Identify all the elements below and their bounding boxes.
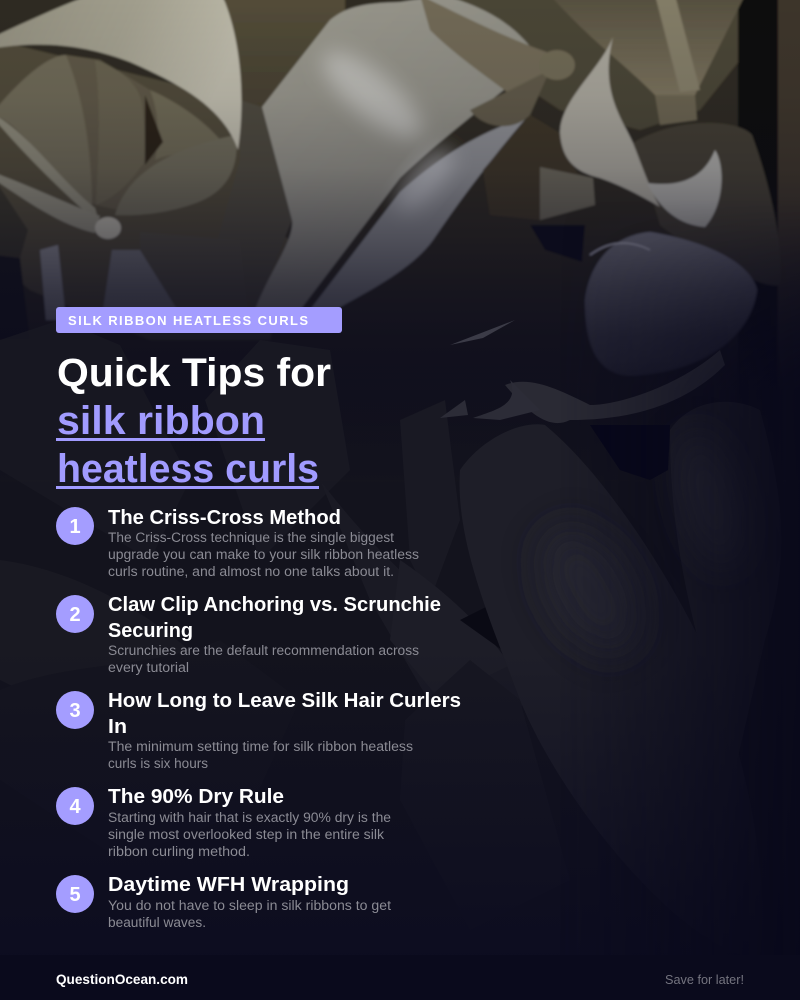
title: silk ribbon: [57, 399, 265, 443]
tip 5: beautiful waves.: [108, 915, 206, 930]
tip 5: [56, 874, 391, 930]
category tag: SILK RIBBON HEATLESS CURLS: [68, 313, 308, 328]
tip 2: every tutorial: [108, 660, 189, 675]
tip 3: 3: [69, 700, 81, 722]
title: [56, 351, 331, 491]
right bow: [550, 0, 745, 95]
tip 3: In: [108, 716, 127, 738]
translucent olive ribbon and small knot: [420, 0, 555, 110]
large satin leaf: [460, 424, 762, 960]
title: Quick Tips for: [57, 351, 331, 395]
tip 4: [56, 786, 391, 859]
tip 1: The Criss-Cross technique is the single biggest: [108, 530, 394, 545]
tip 4: 4: [69, 796, 81, 818]
tip 2: [56, 594, 441, 675]
top left ribbon loop: [0, 0, 241, 150]
tip 1: The Criss-Cross Method: [108, 507, 341, 529]
tip 2: Claw Clip Anchoring vs. Scrunchie: [108, 594, 441, 616]
title: heatless curls: [57, 447, 319, 491]
tip 1: curls routine, and almost no one talks about it.: [108, 564, 394, 579]
tip 4: single most overlooked step in the entire silk: [108, 827, 384, 842]
tip 4: Starting with hair that is exactly 90% dry is the: [108, 810, 391, 825]
tip 4: The 90% Dry Rule: [108, 786, 284, 808]
footer save note: Save for later!: [665, 972, 744, 987]
tip 4: ribbon curling method.: [108, 844, 250, 859]
right satin leaf: [670, 402, 781, 770]
tip 1: [56, 507, 419, 579]
tip 1: 1: [69, 516, 81, 538]
tip 2: Scrunchies are the default recommendation across: [108, 643, 419, 658]
category tag: [56, 307, 342, 333]
dark gap: [590, 425, 670, 480]
knot with strings: [505, 350, 725, 423]
footer bar: [0, 955, 800, 1000]
tip 5: 5: [69, 884, 81, 906]
tip 3: [56, 690, 461, 771]
lower dark ribbons: [0, 320, 800, 980]
tip 3: The minimum setting time for silk ribbon heatless: [108, 739, 413, 754]
tip 3: How Long to Leave Silk Hair Curlers: [108, 690, 461, 712]
dark fade overlay: [0, 0, 800, 480]
upper ribbon bows: [0, 0, 800, 485]
footer site name: QuestionOcean.com: [56, 972, 188, 987]
tip 3: curls is six hours: [108, 756, 208, 771]
central satin band: [255, 0, 540, 310]
tip 5: You do not have to sleep in silk ribbons to get: [108, 898, 391, 913]
tip 2: Securing: [108, 620, 193, 642]
tip 2: 2: [69, 604, 81, 626]
tip 5: Daytime WFH Wrapping: [108, 874, 349, 896]
knot of left bow: [95, 217, 121, 239]
lower satin band: [310, 117, 527, 310]
translucent lower bow: [585, 232, 757, 376]
tip 1: upgrade you can make to your silk ribbon heatless: [108, 547, 419, 562]
